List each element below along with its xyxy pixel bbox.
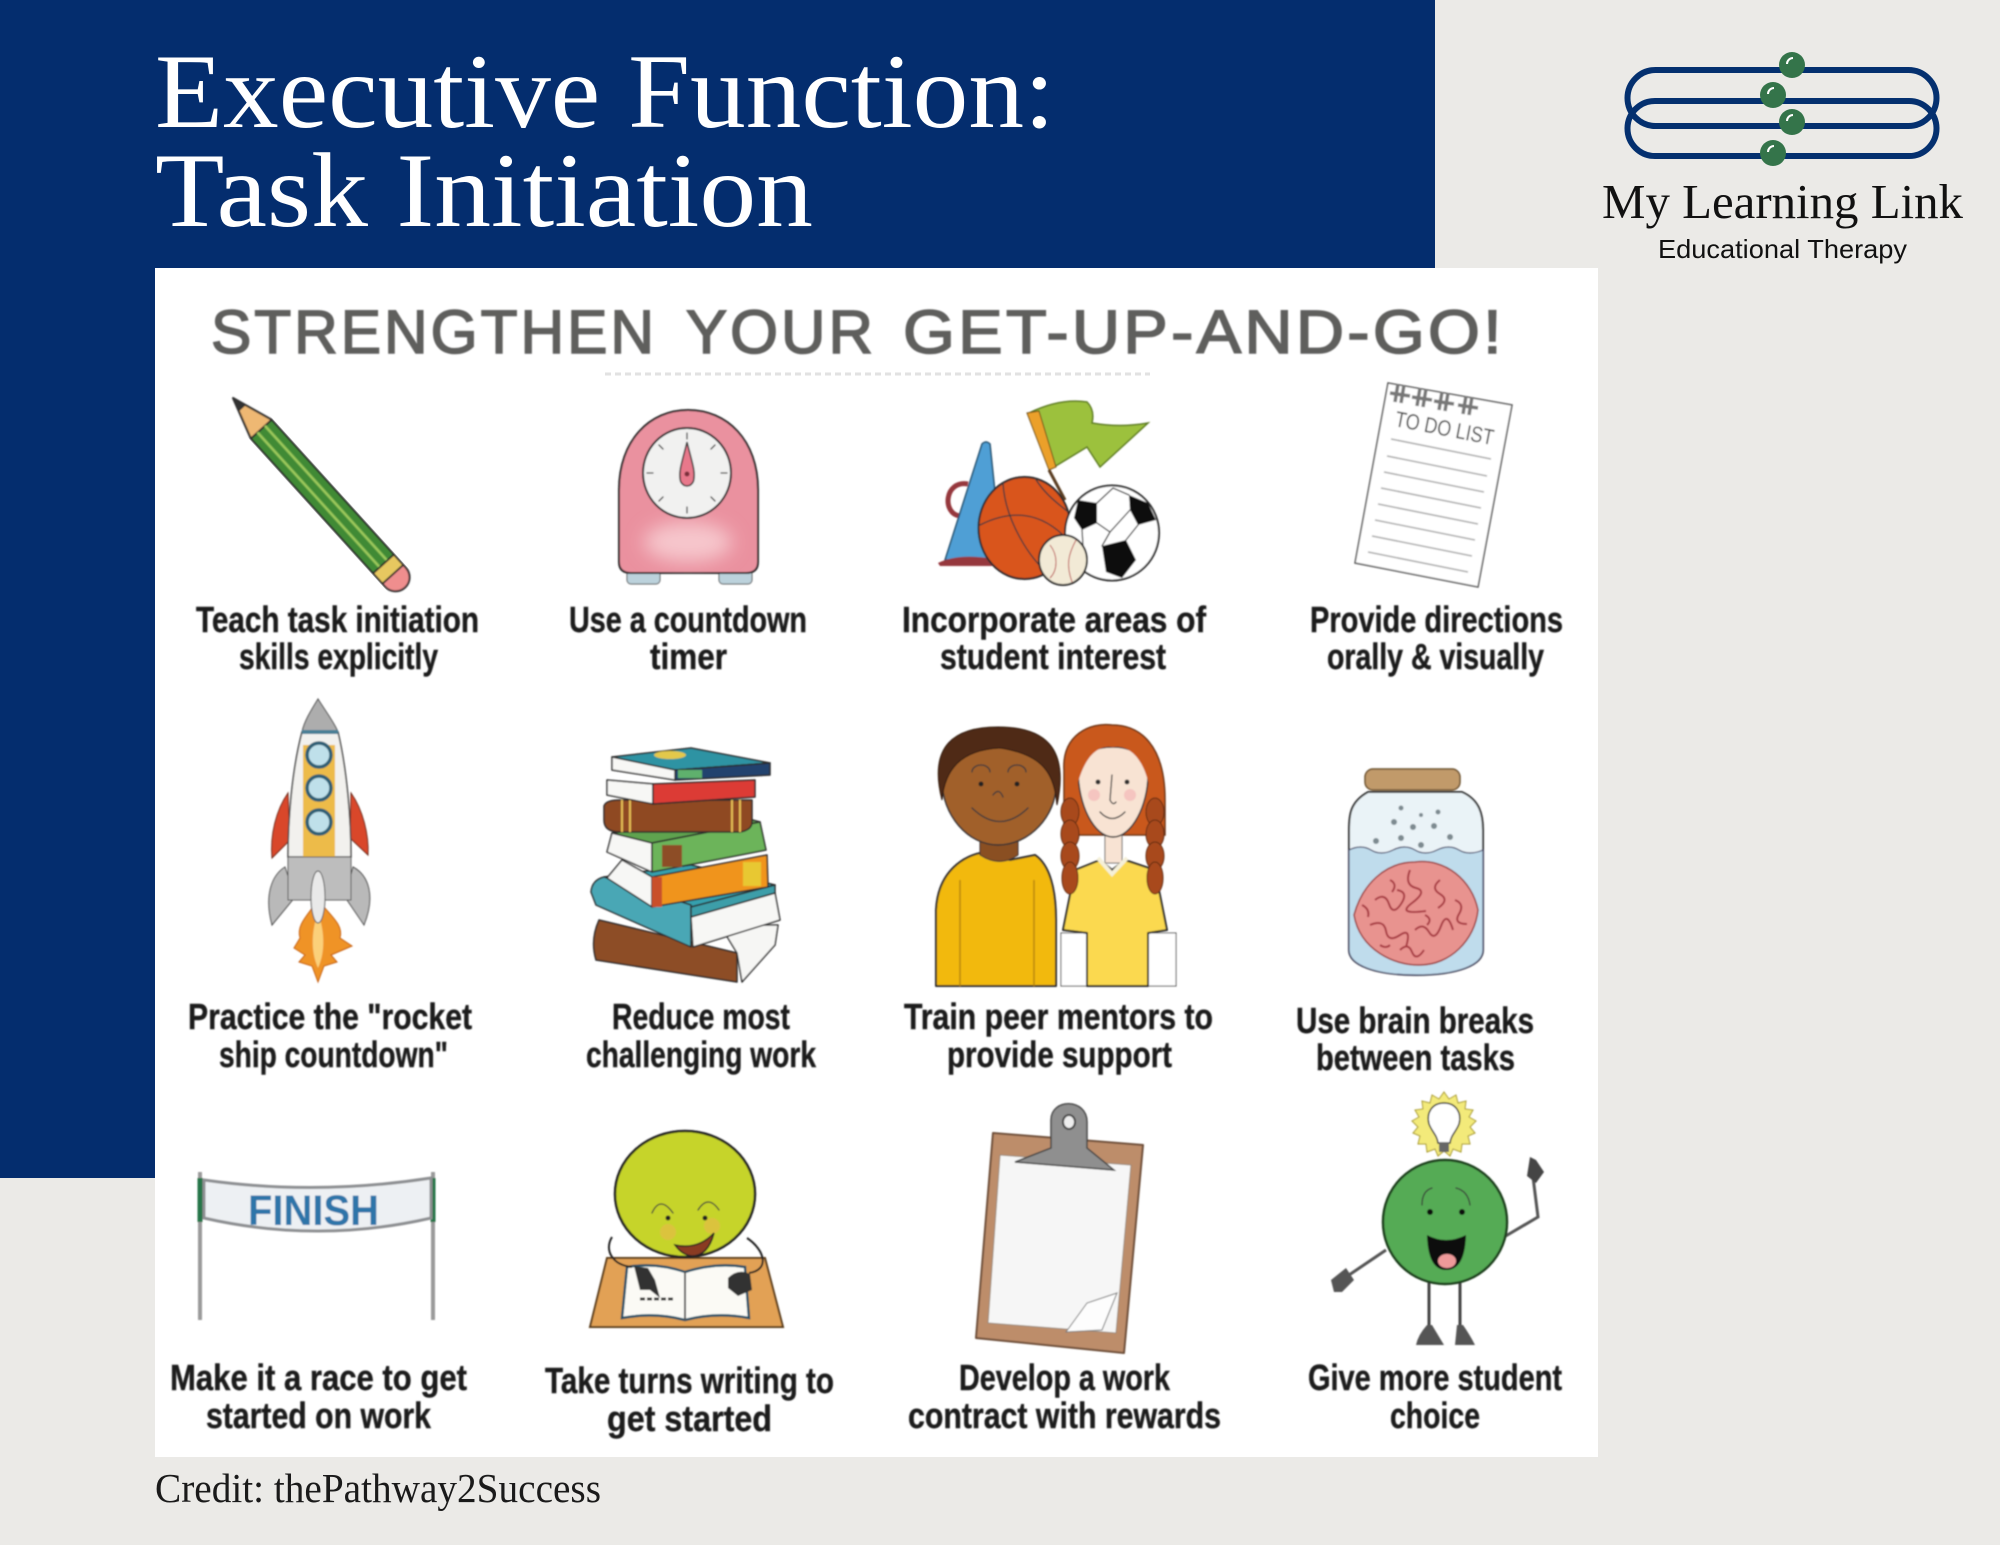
item: student interest (902, 401, 1207, 677)
caption: Reduce most (612, 996, 790, 1037)
caption (1296, 1000, 1534, 1078)
item: race (170, 1172, 467, 1436)
icon: to do list (1355, 383, 1512, 587)
heading: STRENGTHEN (211, 298, 657, 366)
caption: between tasks (1316, 1037, 1515, 1078)
item: rocket ship countdown (188, 699, 472, 1075)
item: directions (1310, 383, 1563, 677)
caption: Use brain breaks (1296, 1000, 1534, 1041)
title: Task Initiation (155, 132, 813, 249)
caption: Provide directions (1310, 599, 1563, 640)
logo: My Learning Link (1602, 52, 1963, 264)
item: countdown timer (569, 410, 807, 677)
caption (170, 1357, 467, 1436)
icon: pink timer (619, 410, 758, 584)
heading (211, 298, 1505, 366)
caption (586, 996, 817, 1075)
caption: Develop a work (959, 1357, 1171, 1398)
caption: Use a countdown (569, 599, 807, 640)
panel: strategies card (155, 268, 1598, 1457)
icon: pencil (223, 389, 415, 597)
title (155, 33, 1055, 249)
item: peer mentors (904, 725, 1213, 1075)
caption: Make it a race to get (170, 1357, 467, 1398)
credit line: Credit: thePathway2Success (155, 1465, 601, 1511)
item: teach task initiation (196, 389, 479, 677)
caption: challenging work (586, 1034, 817, 1075)
heading: GET-UP-AND-GO! (903, 298, 1505, 366)
caption (902, 599, 1207, 677)
icon: brain in a jar (1349, 769, 1483, 975)
icon: sports equipment (938, 401, 1159, 585)
caption (545, 1360, 834, 1439)
icon: finish line banner: FINISH (248, 1187, 379, 1235)
caption: provide support (947, 1034, 1172, 1075)
logo subtitle: Educational Therapy (1658, 234, 1907, 264)
caption (196, 599, 479, 677)
caption: contract with rewards (908, 1395, 1221, 1436)
caption: started on work (206, 1395, 432, 1436)
caption: Practice the "rocket (188, 996, 472, 1037)
navy header block (0, 0, 1435, 1178)
icon: rocket (269, 699, 370, 982)
item: take turns writing (545, 1131, 834, 1439)
logo wordmark: My Learning Link (1602, 174, 1963, 229)
caption (569, 599, 807, 677)
caption: Teach task initiation (196, 599, 479, 640)
heading: YOUR (686, 298, 876, 366)
icon: to do list: TO DO LIST (1393, 406, 1496, 450)
caption: Give more student (1308, 1357, 1562, 1398)
caption: Train peer mentors to (904, 996, 1213, 1037)
caption: get started (607, 1398, 772, 1439)
item: brain breaks (1296, 769, 1534, 1078)
caption: timer (650, 636, 727, 677)
caption (904, 996, 1213, 1075)
icon: character reading a book (590, 1131, 783, 1327)
caption (1310, 599, 1563, 677)
item: reduce challenging work (586, 748, 817, 1075)
caption: Incorporate areas of (902, 599, 1207, 640)
icon: stack of books (591, 748, 780, 982)
caption: orally & visually (1327, 636, 1544, 677)
title: Executive Function: (155, 33, 1055, 150)
item: student choice (1308, 1092, 1562, 1436)
icon: clipboard (976, 1104, 1143, 1353)
caption (908, 1357, 1221, 1436)
caption: choice (1390, 1395, 1480, 1436)
item: work contract (908, 1104, 1221, 1436)
caption (188, 996, 472, 1075)
icon: two students (936, 725, 1176, 986)
caption: Take turns writing to (545, 1360, 834, 1401)
icon: interlocking loops with beads (1628, 52, 1936, 166)
caption (1308, 1357, 1562, 1436)
icon: green character with light bulb (1331, 1092, 1544, 1345)
icon: finish line banner (200, 1172, 433, 1320)
caption: student interest (940, 636, 1166, 677)
caption: ship countdown" (219, 1034, 448, 1075)
caption: skills explicitly (239, 636, 438, 677)
